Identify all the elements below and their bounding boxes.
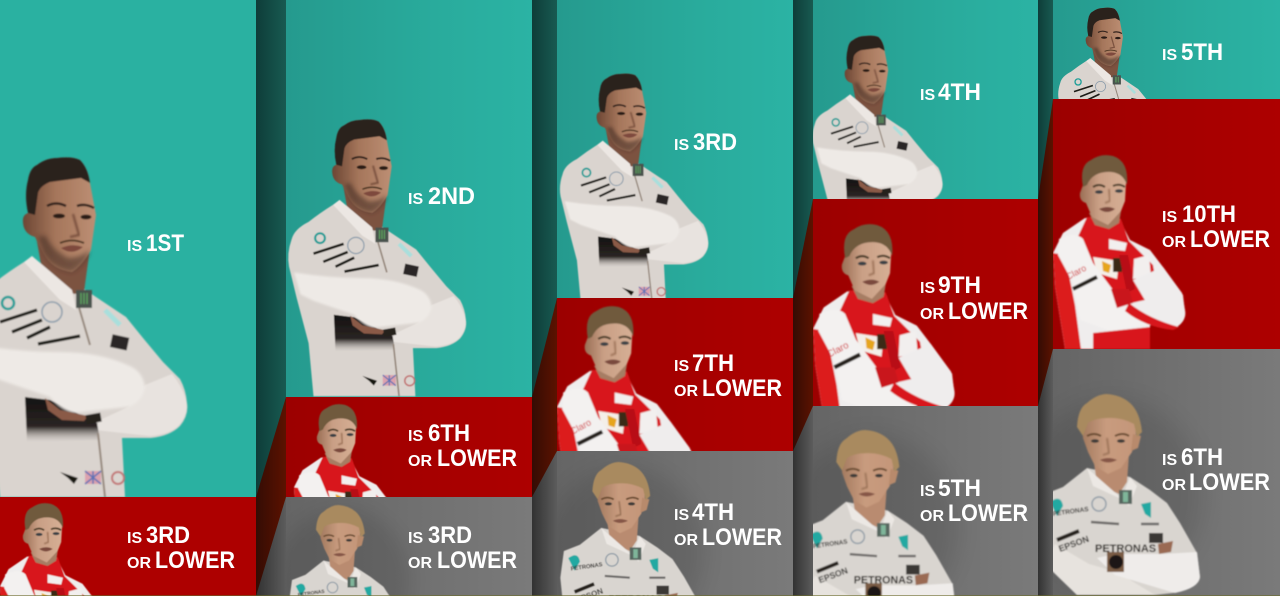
- label: is 6th or lower: LOWER: [437, 445, 517, 472]
- label: is 4th: 4TH: [938, 79, 981, 106]
- photo: Hamilton: [1053, 0, 1280, 99]
- photo: Vettel: [557, 298, 793, 451]
- label: is 6th or lower: 6TH: [428, 420, 470, 447]
- photo: Rosberg: [813, 406, 1038, 596]
- label: is 7th or lower: LOWER: [702, 375, 782, 402]
- photo: Vettel: [813, 199, 1038, 406]
- label: is 3rd: IS: [674, 137, 689, 154]
- label: is 3rd or lower: IS: [408, 530, 423, 547]
- column 1: race scenario: [0, 0, 256, 596]
- photo: Rosberg: [1053, 349, 1280, 596]
- label: is 5th: IS: [1162, 47, 1177, 64]
- photo: Rosberg: [286, 497, 532, 596]
- label: is 3rd or lower: 3RD: [146, 522, 190, 549]
- label: is 4th or lower: IS: [674, 507, 689, 524]
- gutter 3: perspective connector: [793, 0, 813, 596]
- photo: Vettel: [1053, 99, 1280, 349]
- column 2: race scenario: [286, 0, 532, 596]
- label: is 3rd or lower: OR: [127, 555, 151, 572]
- label: is 10th or lower: OR: [1162, 234, 1186, 251]
- label: is 2nd: 2ND: [428, 183, 475, 210]
- label: is 3rd or lower: LOWER: [437, 547, 517, 574]
- label: is 4th or lower: 4TH: [692, 499, 734, 526]
- label: is 9th or lower: 9TH: [938, 272, 981, 299]
- label: is 4th or lower: LOWER: [702, 524, 782, 551]
- column 3: race scenario: [557, 0, 793, 596]
- label: is 5th: 5TH: [1181, 39, 1223, 66]
- label: is 6th or lower: LOWER: [1189, 469, 1270, 496]
- photo: Hamilton: [0, 0, 256, 497]
- gutter 4: perspective connector: [1038, 0, 1053, 596]
- label: is 10th or lower: 10TH: [1182, 201, 1236, 228]
- photo: Vettel: [286, 397, 532, 497]
- label: is 2nd: IS: [408, 191, 423, 208]
- label: is 3rd or lower: IS: [127, 530, 142, 547]
- photo: Rosberg: [557, 451, 793, 596]
- panel: Rosberg is 4th or lower: [557, 451, 793, 596]
- photo: Hamilton: [557, 0, 793, 298]
- photo: Vettel: [0, 497, 256, 596]
- panel: Rosberg is 5th or lower: [813, 406, 1038, 596]
- label: is 6th or lower: IS: [1162, 452, 1177, 469]
- label: is 1st: IS: [127, 238, 142, 255]
- label: is 3rd or lower: OR: [408, 555, 432, 572]
- label: is 6th or lower: OR: [1162, 477, 1186, 494]
- label: is 5th or lower: IS: [920, 483, 935, 500]
- column 4: race scenario: [813, 0, 1038, 596]
- panel: Hamilton is 4th: [813, 0, 1038, 199]
- label: is 4th or lower: OR: [674, 532, 698, 549]
- label: is 9th or lower: LOWER: [948, 298, 1028, 325]
- label: is 10th or lower: LOWER: [1190, 226, 1270, 253]
- label: is 6th or lower: IS: [408, 428, 423, 445]
- panel: Rosberg is 3rd or lower: [286, 497, 532, 596]
- column 5: race scenario: [1053, 0, 1280, 596]
- label: is 3rd: 3RD: [693, 129, 737, 156]
- label: is 5th or lower: LOWER: [948, 500, 1028, 527]
- panel: Vettel is 10th or lower: [1053, 99, 1280, 349]
- label: is 5th or lower: 5TH: [938, 475, 981, 502]
- photo: Hamilton: [813, 0, 1038, 199]
- gutter 2: perspective connector: [532, 0, 557, 596]
- panel: Rosberg is 6th or lower: [1053, 349, 1280, 596]
- panel: Vettel is 9th or lower: [813, 199, 1038, 406]
- panel: Vettel is 7th or lower: [557, 298, 793, 451]
- label: is 3rd or lower: LOWER: [155, 547, 235, 574]
- label: is 10th or lower: IS: [1162, 209, 1177, 226]
- photo: Hamilton: [286, 0, 532, 397]
- panel: Hamilton is 1st: [0, 0, 256, 497]
- panel: Vettel is 3rd or lower: [0, 497, 256, 596]
- panel: Vettel is 6th or lower: [286, 397, 532, 497]
- label: is 7th or lower: 7TH: [692, 350, 734, 377]
- label: is 9th or lower: OR: [920, 306, 944, 323]
- label: is 9th or lower: IS: [920, 280, 935, 297]
- panel: Hamilton is 3rd: [557, 0, 793, 298]
- label: is 7th or lower: OR: [674, 383, 698, 400]
- panel: Hamilton is 5th: [1053, 0, 1280, 99]
- label: is 6th or lower: OR: [408, 453, 432, 470]
- label: is 6th or lower: 6TH: [1181, 444, 1223, 471]
- label: is 7th or lower: IS: [674, 358, 689, 375]
- label: is 3rd or lower: 3RD: [428, 522, 472, 549]
- panel: Hamilton is 2nd: [286, 0, 532, 397]
- label: is 4th: IS: [920, 87, 935, 104]
- gutter 1: perspective connector: [256, 0, 286, 596]
- label: is 1st: 1ST: [146, 230, 184, 257]
- label: is 5th or lower: OR: [920, 508, 944, 525]
